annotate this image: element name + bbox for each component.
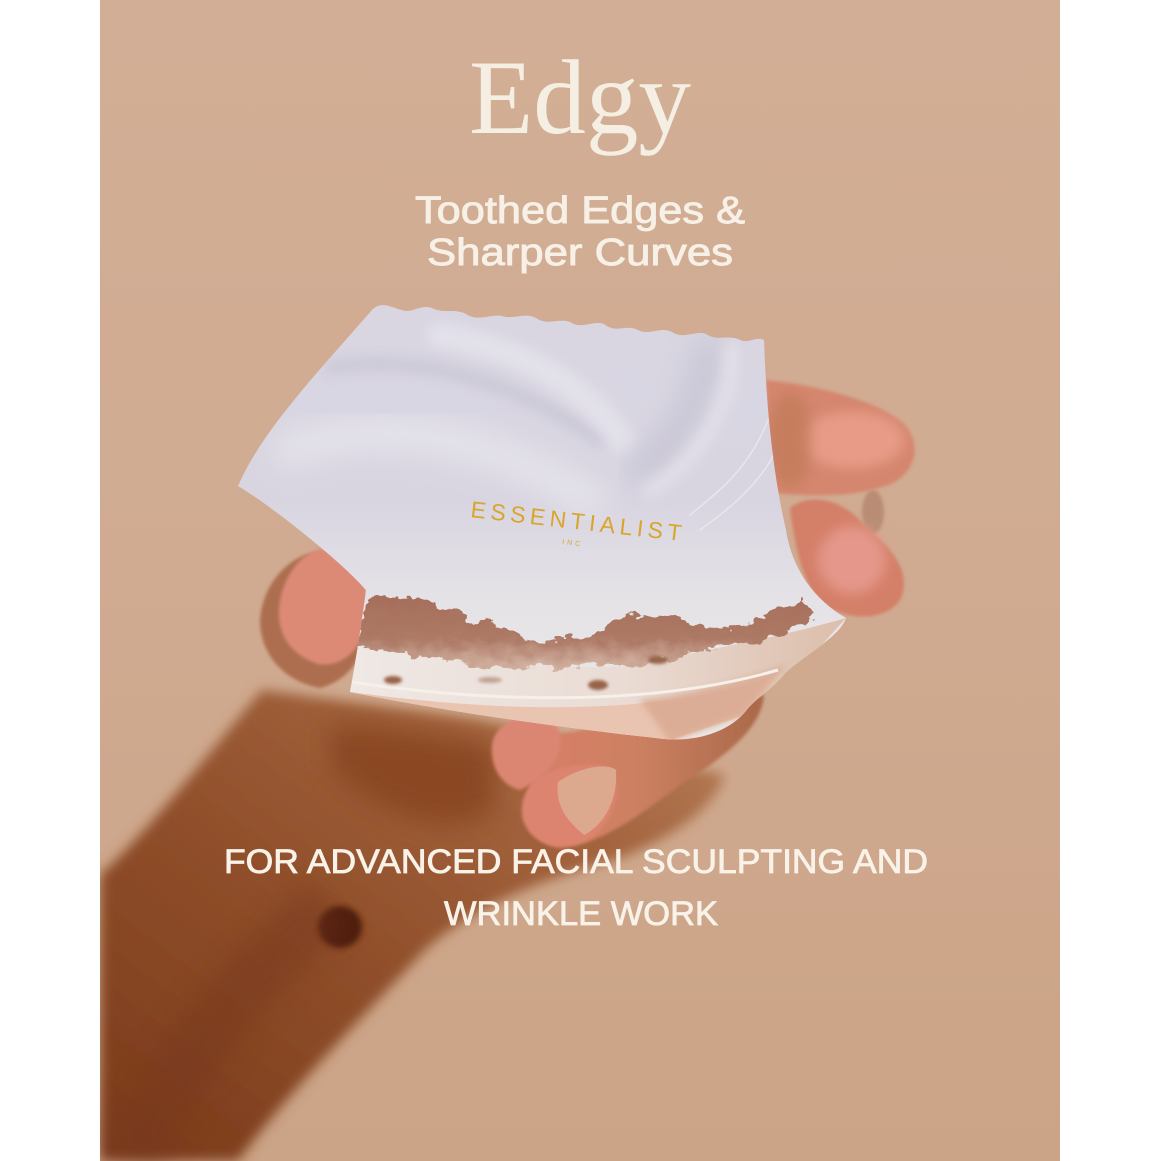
clear corner tone: [640, 665, 786, 742]
translucent lower stone: [350, 618, 846, 742]
caption: [224, 843, 928, 933]
subtitle line two: Sharper Curves: [427, 232, 733, 274]
upper right finger: [766, 380, 915, 495]
palm shadow: [330, 725, 495, 825]
wrist freckle: [318, 906, 362, 948]
stone swirl bands: [290, 335, 776, 530]
gua sha stone: [230, 300, 860, 750]
caption line two: WRINKLE WORK: [444, 895, 718, 933]
caption line one: FOR ADVANCED FACIAL SCULPTING AND: [224, 843, 928, 881]
lower finger highlight: [818, 526, 886, 594]
finger behind: [862, 490, 884, 534]
upper finger highlight: [800, 412, 904, 468]
brand name: ESSENTIALIST: [469, 496, 683, 546]
agate edge line: [352, 670, 778, 698]
hand photo illustration: [100, 300, 915, 1161]
title: Edgy: [469, 39, 691, 156]
crystal brown band: [358, 596, 815, 668]
lower right finger: [790, 499, 904, 617]
arm and back of hand: [100, 690, 725, 1161]
brown inclusions: [384, 656, 668, 690]
upper finger knuckle tone: [768, 392, 812, 488]
subtitle line one: Toothed Edges &: [415, 190, 745, 232]
lower clear band: [351, 692, 757, 740]
subtitle: [415, 190, 745, 274]
forearm tonal shadow: [130, 905, 330, 1161]
brand suffix: INC: [562, 539, 580, 548]
thumb: [260, 548, 368, 688]
brand wordmark: [472, 502, 682, 546]
bottom fingers: [492, 695, 764, 848]
